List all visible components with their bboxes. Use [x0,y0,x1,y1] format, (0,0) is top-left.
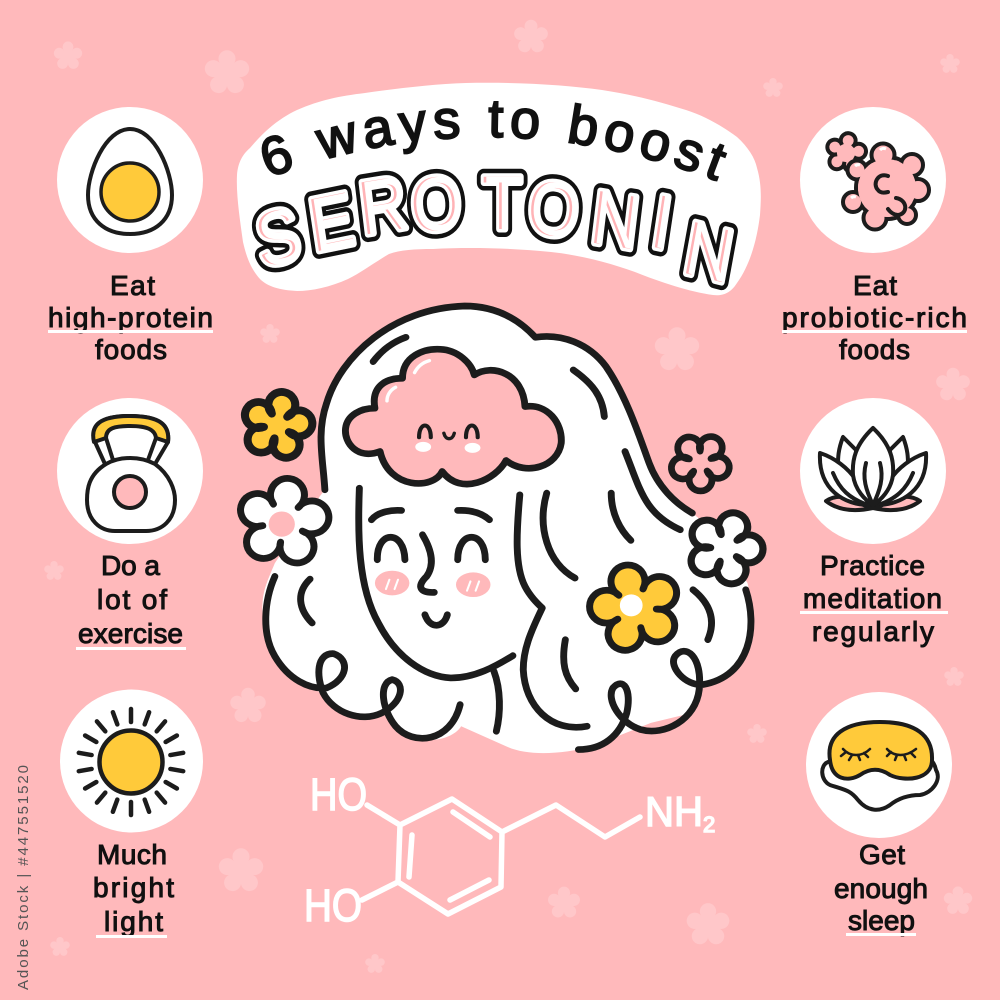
panel: get enough sleep [806,692,952,936]
label [93,839,174,938]
label: meditation [803,583,942,614]
molecule labels [304,769,715,931]
label [834,839,928,936]
icon: sleep mask [822,722,938,810]
panel: practice meditation regularly [800,398,948,647]
flower: large yellow [581,554,689,657]
kettlebell circle [57,398,203,544]
label: Practice [820,550,925,581]
sun circle [60,690,203,832]
bacteria circle [800,107,946,253]
panel: do a lot of exercise [57,398,203,650]
label [48,270,213,365]
panel: eat probiotic-rich foods [782,107,967,365]
icon: sun [79,709,183,815]
label: foods [95,334,167,365]
label: probiotic-rich [782,302,967,333]
panel: much bright light [60,690,203,938]
label: Get [859,839,905,870]
serotonin molecule [304,769,715,931]
flower: small yellow [237,385,318,462]
molecule bonds [362,799,640,914]
hair outlines [266,306,751,750]
title: SEROTONIN: SEROTONIN [252,160,742,300]
label: exercise [78,618,183,649]
woman illustration [234,306,773,753]
label [76,550,186,650]
label: regularly [812,616,934,647]
title blob [237,83,761,295]
label [782,270,967,365]
stock id side text: Adobe Stock | #447551520 [15,765,32,990]
icon: lotus [820,428,926,510]
label: Eat [853,270,897,301]
label: Much [97,839,167,870]
molecule labels: HO [304,880,362,931]
label: sleep [848,905,915,936]
label [800,550,948,647]
molecule labels: 2 [703,812,715,837]
egg circle [57,107,203,253]
hair white fill [262,306,752,753]
label: high-protein [48,302,213,333]
icon: egg [88,129,172,234]
title: SEROTONIN: SEROTONIN [249,160,739,300]
mask circle [806,692,952,838]
face [359,488,513,731]
title: SEROTONIN: SEROTONIN [249,160,739,300]
flower: white right [679,502,773,591]
flower: small pink [661,423,741,499]
label: lot of [97,584,167,615]
molecule labels: HO [310,769,367,820]
icon: bacteria [824,130,929,230]
label: Do a [101,550,160,581]
icon: kettlebell [87,416,175,531]
label: foods [839,334,910,365]
flower: large white [234,473,334,567]
label: Eat [110,270,155,301]
label: light [104,906,163,937]
lotus circle [800,398,946,544]
label: bright [93,872,174,903]
molecule labels: NH [645,788,703,835]
title: 6 ways to boost: 6 ways to boost [262,101,728,182]
panel: eat high-protein foods [48,107,213,365]
brain cloud [345,349,561,484]
label: enough [834,873,928,904]
